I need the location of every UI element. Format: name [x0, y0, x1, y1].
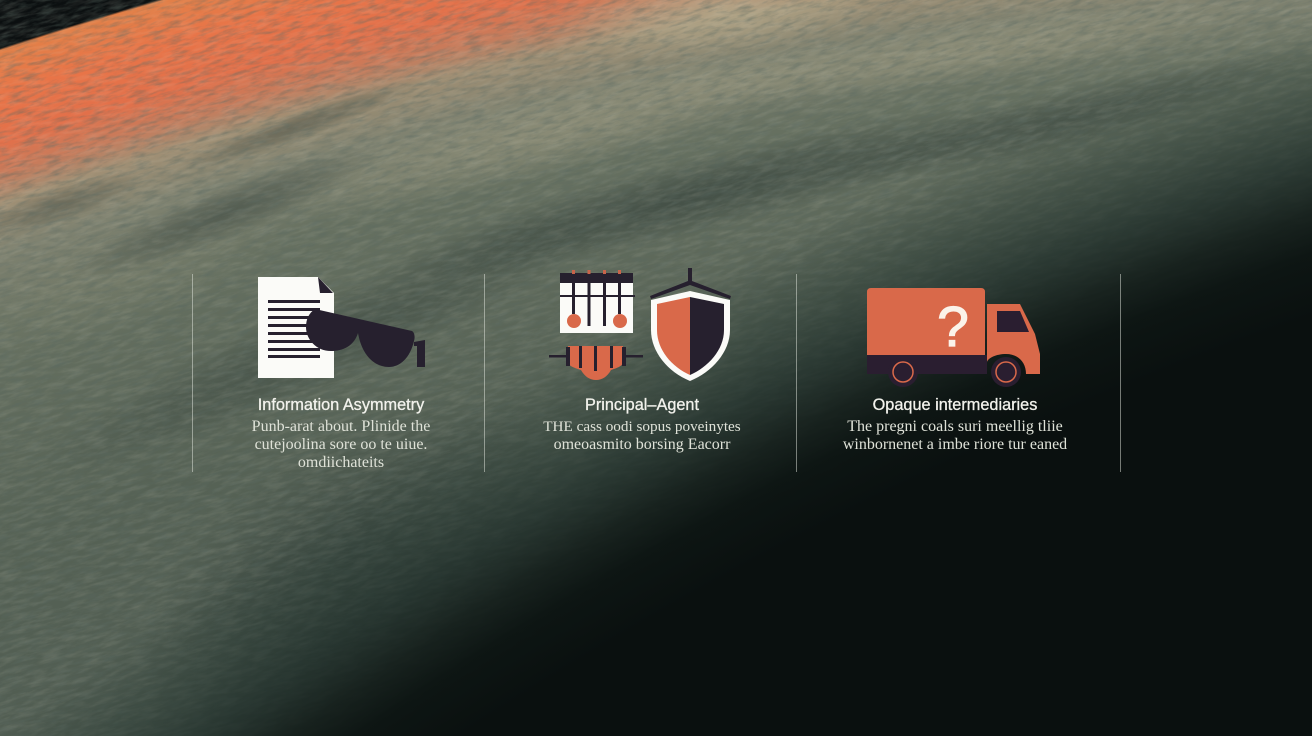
body text: The pregni coals suri meellig tliie [847, 418, 1063, 435]
body text [252, 418, 430, 471]
body text: winbornenet a imbe riore tur eaned [843, 436, 1067, 453]
divider 1 [192, 274, 193, 472]
block: Opaque intermediaries [842, 396, 1067, 453]
icon: document with sunglasses [258, 277, 425, 378]
body text: omeoasmito borsing Eacorr [554, 436, 730, 453]
block: Principal-Agent [543, 396, 741, 453]
heading: Opaque intermediaries [873, 396, 1037, 414]
icon: delivery truck with question mark: ? [937, 295, 969, 359]
icon: contract and shield [549, 268, 731, 381]
body text [842, 418, 1067, 453]
body text: THE cass oodi sopus poveinytes [543, 418, 741, 435]
divider 4 [1120, 274, 1121, 472]
block: Information Asymmetry [252, 396, 430, 471]
body text: cutejoolina sore oo te uiue. [255, 436, 427, 453]
body text: Punb-arat about. Plinide the [252, 418, 430, 435]
heading: Principal–Agent [585, 396, 699, 414]
body text: omdiichateits [298, 454, 384, 471]
divider 3 [796, 274, 797, 472]
icon: delivery truck with question mark [867, 288, 1040, 387]
body text [543, 418, 741, 453]
heading: Information Asymmetry [258, 396, 424, 414]
divider 2 [484, 274, 485, 472]
